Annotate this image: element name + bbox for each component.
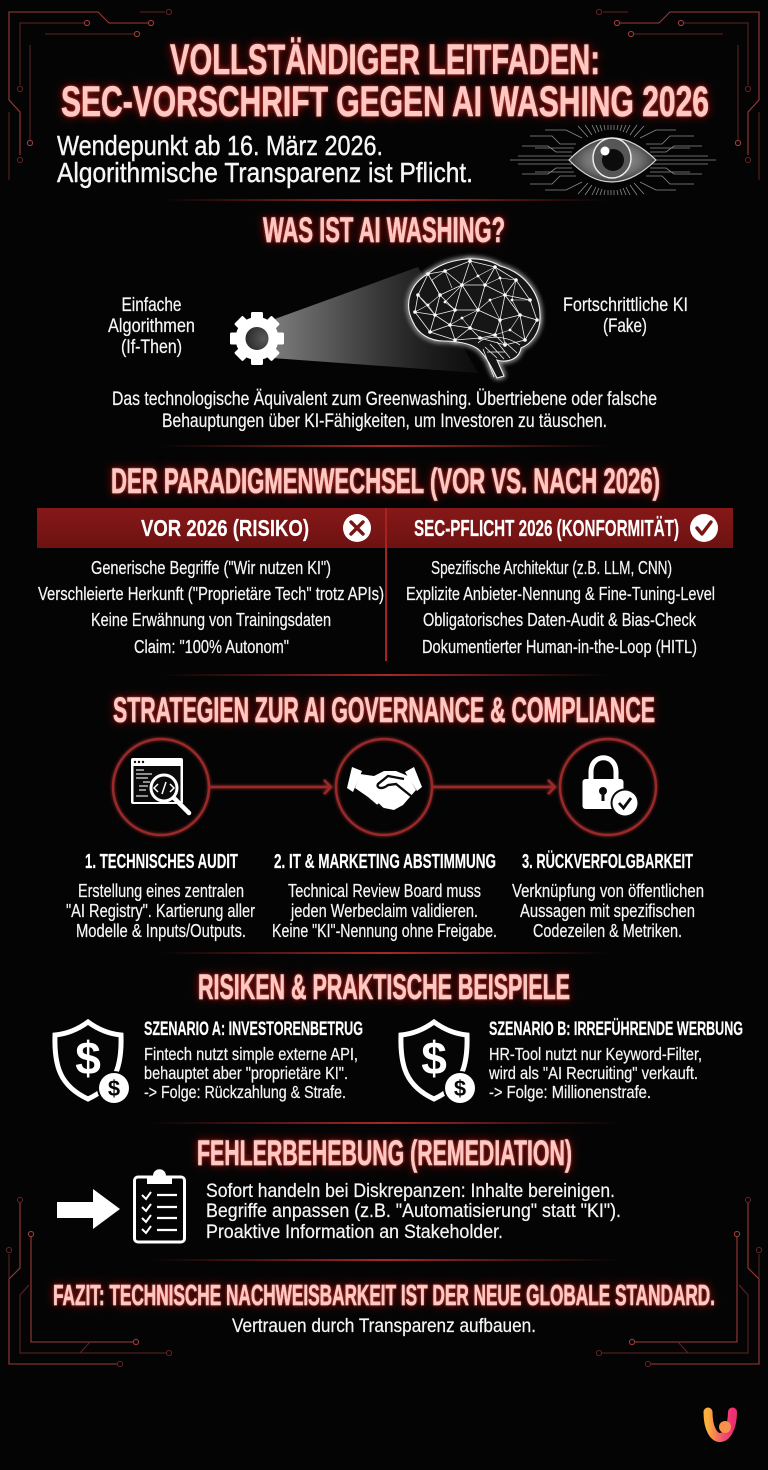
icon: clipboard checklist <box>134 1169 184 1242</box>
step 3 text: Codezeilen & Metriken. <box>533 921 682 941</box>
step 2 text <box>272 850 497 941</box>
header: vor 2026: VOR 2026 (RISIKO) <box>141 515 309 541</box>
circuit frame: top left <box>9 9 172 180</box>
label: fortschrittliche ki: (Fake) <box>603 315 647 337</box>
step 2 text: Keine "KI"-Nennung ohne Freigabe. <box>272 921 497 941</box>
icon: padlock with check <box>582 758 640 818</box>
step 3 text <box>512 850 704 941</box>
step 2 text: jeden Werbeclaim validieren. <box>290 901 478 921</box>
step 3 text: Verknüpfung von öffentlichen <box>512 881 704 901</box>
left column items: Keine Erwähnung von Trainingsdaten <box>91 610 331 630</box>
icon: glowing brain <box>409 259 540 378</box>
logo <box>708 1412 732 1438</box>
scenario A text: SZENARIO A: INVESTORENBETRUG <box>144 1018 363 1040</box>
divider <box>160 445 610 447</box>
column divider <box>385 508 387 661</box>
icon: gear <box>230 312 284 365</box>
divider <box>160 674 610 676</box>
left column items: Verschleierte Herkunft ("Proprietäre Tech" trotz APIs) <box>38 584 384 604</box>
label: einfache algorithmen: Einfache <box>122 294 182 316</box>
scenario B text: -> Folge: Millionenstrafe. <box>489 1082 651 1102</box>
scenario B text <box>488 1017 743 1102</box>
left column items <box>38 558 384 657</box>
icon: shield dollar A: $ <box>108 1076 120 1101</box>
circuit frame: top right <box>596 9 759 180</box>
label: einfache algorithmen: (If-Then) <box>121 336 182 358</box>
title <box>61 36 709 126</box>
heading: was ist ai washing: WAS IST AI WASHING? <box>263 211 505 250</box>
divider <box>150 1259 620 1261</box>
icon: handshake <box>347 767 422 811</box>
icon: white arrow <box>57 1189 120 1229</box>
icon: shield dollar B <box>401 1022 477 1105</box>
subtitle: Wendepunkt ab 16. März 2026. <box>57 130 383 161</box>
definition text: Behauptungen über KI-Fähigkeiten, um Investoren zu täuschen. <box>162 410 607 432</box>
icon: shield dollar A: $ <box>75 1032 101 1084</box>
remediation text: Sofort handeln bei Diskrepanzen: Inhalte bereinigen. <box>206 1180 615 1202</box>
scenario A text: behauptet aber "proprietäre KI". <box>144 1063 348 1083</box>
scenario A text: -> Folge: Rückzahlung & Strafe. <box>144 1082 346 1102</box>
table header bar <box>37 508 733 548</box>
circuit frame: bottom right <box>596 1197 762 1367</box>
right column items: Obligatorisches Daten-Audit & Bias-Check <box>423 610 697 630</box>
divider <box>160 199 610 201</box>
left column items: Claim: "100% Autonom" <box>134 637 289 657</box>
label: fortschrittliche ki <box>563 294 688 337</box>
definition text <box>112 388 657 432</box>
icon: shield dollar A <box>55 1022 131 1105</box>
label: einfache algorithmen: Algorithmen <box>108 315 195 337</box>
step circles and arrows <box>113 739 656 835</box>
label: fortschrittliche ki: Fortschrittliche KI <box>563 294 688 316</box>
remediation text: Proaktive Information an Stakeholder. <box>206 1221 503 1243</box>
icon: circuit eye <box>510 125 716 195</box>
definition text: Das technologische Äquivalent zum Greenwashing. Übertriebene oder falsche <box>112 388 657 410</box>
subtitle: Algorithmische Transparenz ist Pflicht. <box>57 157 473 188</box>
conclusion subline: Vertrauen durch Transparenz aufbauen. <box>232 1315 536 1337</box>
remediation text: Begriffe anpassen (z.B. "Automatisierung" statt "KI"). <box>206 1200 621 1222</box>
scenario B text: HR-Tool nutzt nur Keyword-Filter, <box>489 1044 702 1064</box>
scenario A text <box>144 1018 363 1102</box>
step 1 text: "AI Registry". Kartierung aller <box>66 901 255 921</box>
subtitle <box>57 130 473 188</box>
right column items <box>406 558 715 657</box>
icon: shield dollar B: $ <box>454 1076 466 1101</box>
step 2 text: 2. IT & MARKETING ABSTIMMUNG <box>274 850 496 873</box>
divider <box>160 952 610 954</box>
remediation text <box>206 1180 621 1243</box>
light beam <box>272 267 478 373</box>
left column items: Generische Begriffe ("Wir nutzen KI") <box>91 558 331 578</box>
scenario B text: wird als "AI Recruiting" verkauft. <box>488 1063 698 1083</box>
right column items: Spezifische Architektur (z.B. LLM, CNN) <box>431 558 672 578</box>
comparison table <box>37 508 733 661</box>
icon: x circle <box>343 514 371 542</box>
step 1 text: Erstellung eines zentralen <box>78 881 244 901</box>
divider <box>150 1122 620 1124</box>
right column items: Dokumentierter Human-in-the-Loop (HITL) <box>422 637 697 657</box>
circuit frame: bottom left <box>6 1197 172 1367</box>
icon: shield dollar B: $ <box>421 1032 447 1084</box>
step 1 text: Modelle & Inputs/Outputs. <box>76 921 246 941</box>
step 2 text: Technical Review Board muss <box>288 881 481 901</box>
step 3 text: Aussagen mit spezifischen <box>520 901 695 921</box>
icon: code audit <box>131 758 189 813</box>
label: einfache algorithmen <box>108 294 195 358</box>
step 1 text <box>66 850 255 941</box>
step 1 text: 1. TECHNISCHES AUDIT <box>85 850 238 873</box>
icon: check circle <box>690 514 718 542</box>
scenario A text: Fintech nutzt simple externe API, <box>144 1044 358 1064</box>
